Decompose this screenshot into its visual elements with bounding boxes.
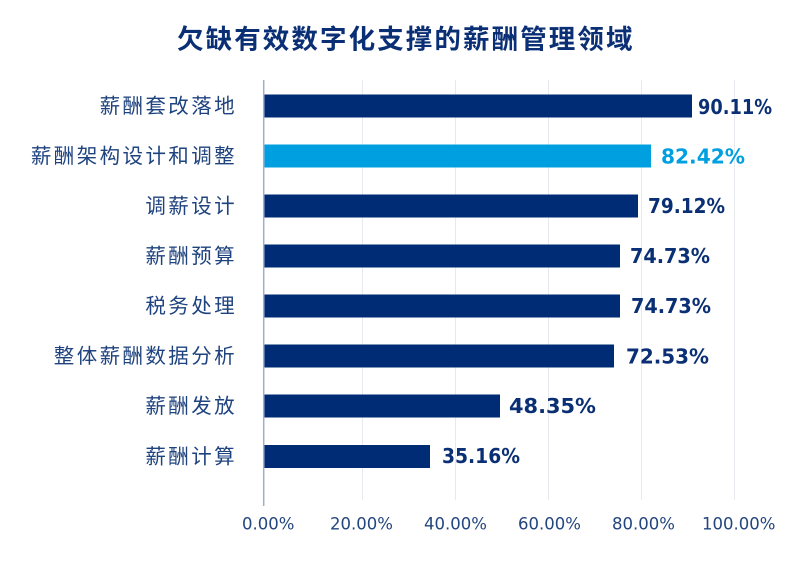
category labels: 薪酬发放: [145, 395, 237, 418]
category labels: [31, 95, 237, 468]
category labels: 整体薪酬数据分析: [54, 345, 237, 368]
category labels: 薪酬计算: [145, 446, 237, 468]
x axis labels: 40.00%: [424, 514, 487, 534]
value labels: 90.11%: [698, 95, 772, 119]
category labels: 薪酬套改落地: [100, 95, 237, 118]
value labels: 74.73%: [631, 294, 711, 318]
value labels: 74.73%: [630, 244, 710, 268]
category labels: 薪酬架构设计和调整: [31, 145, 237, 168]
x axis labels: 100.00%: [702, 514, 775, 534]
value labels: 79.12%: [648, 194, 725, 218]
value labels: [442, 95, 772, 468]
category labels: 税务处理: [145, 295, 237, 318]
x axis labels: [242, 514, 775, 534]
value labels: 35.16%: [442, 444, 520, 468]
vertical axis: [263, 80, 265, 506]
value labels: 82.42%: [661, 144, 745, 168]
value labels: 72.53%: [626, 344, 709, 368]
value labels: 48.35%: [509, 394, 596, 418]
x axis labels: 20.00%: [330, 514, 393, 534]
title: 欠缺有效数字化支撑的薪酬管理领域: [177, 24, 635, 54]
category labels: 薪酬预算: [145, 245, 237, 268]
x axis labels: 60.00%: [518, 514, 581, 534]
x axis labels: 80.00%: [612, 514, 675, 534]
bars: [264, 94, 692, 468]
x axis labels: 0.00%: [242, 514, 294, 534]
category labels: 调薪设计: [145, 195, 237, 218]
